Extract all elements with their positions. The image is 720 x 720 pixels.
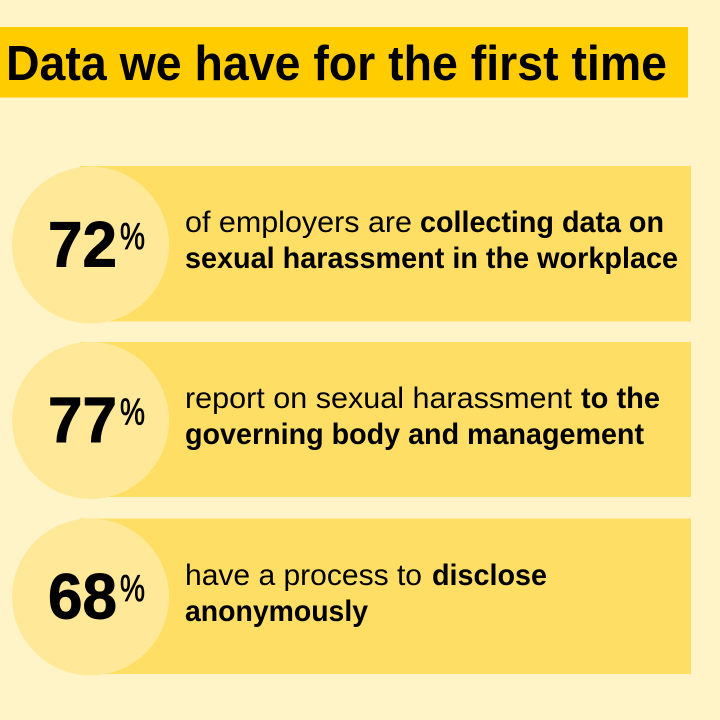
text: disclose anonymously (185, 559, 547, 628)
text: collecting data (185, 206, 678, 275)
text: disclose anonymously: have a process to (185, 559, 422, 592)
stat: 68%: 68 (48, 560, 117, 632)
stat: 77%: % (120, 392, 145, 432)
text: report to governing body: report on sexual harassment (185, 382, 573, 415)
stat: 72%: % (120, 216, 145, 257)
text: disclose anonymously: disclose (432, 559, 547, 592)
title: Data we have for the first time (6, 37, 667, 91)
stat: 68%: % (120, 568, 145, 609)
stat: 77%: 77 (48, 384, 117, 456)
text: report to governing body (185, 382, 660, 451)
title banner (0, 27, 688, 98)
circle: 72% (12, 166, 169, 324)
stat: 72%: 72 (48, 208, 117, 280)
circle: 68% (12, 518, 169, 676)
text: report to governing body: to the (581, 382, 660, 415)
text: collecting data: sexual harassment in the workplace (185, 242, 678, 275)
text: disclose anonymously: anonymously (185, 595, 368, 628)
panel: 72% of employers (12, 166, 691, 324)
text: collecting data: collecting data on (420, 206, 664, 239)
text: collecting data: of employers are (185, 206, 412, 239)
panel: 77% report (12, 342, 691, 499)
panel: 68% disclose (12, 518, 691, 676)
text: report to governing body: governing body and management (185, 418, 644, 451)
circle: 77% (12, 342, 169, 499)
